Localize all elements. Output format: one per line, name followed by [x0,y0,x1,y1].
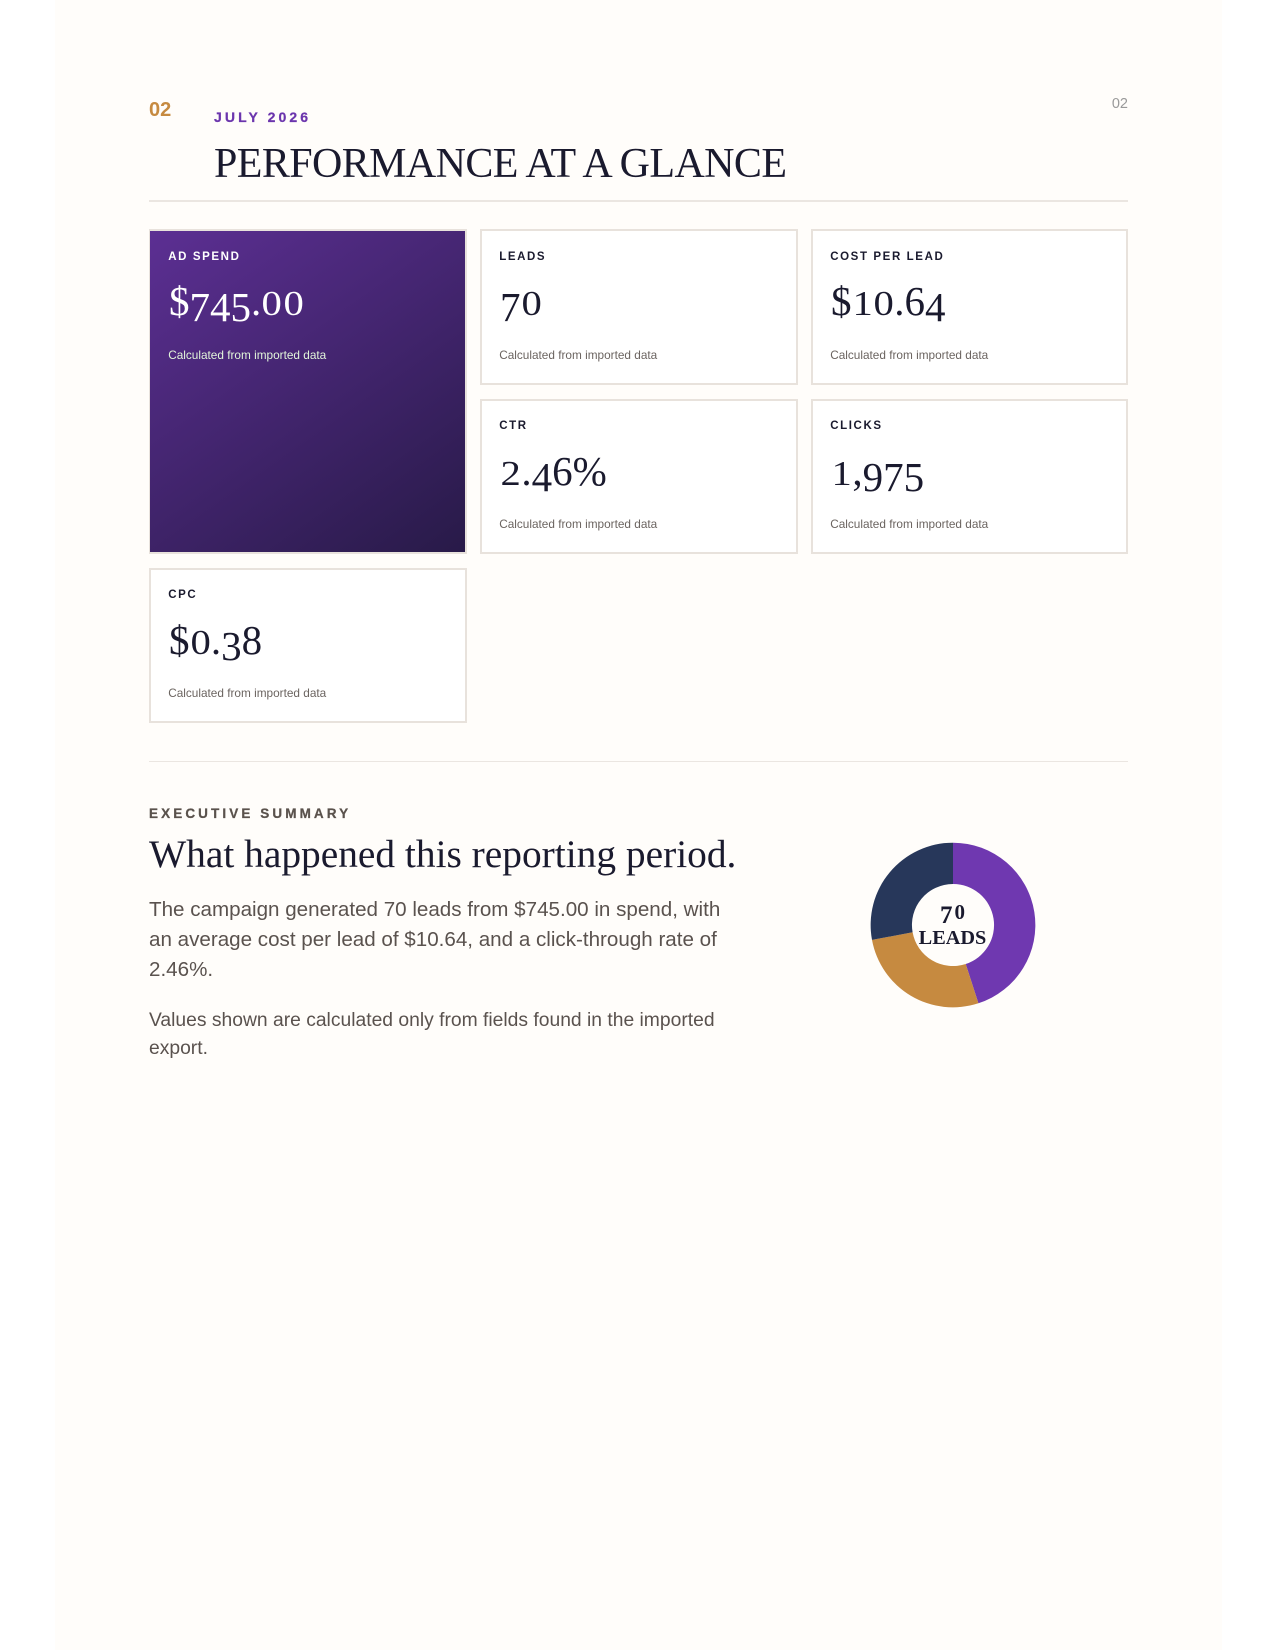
note: Calculated from imported data [499,517,657,531]
panel: cost per lead [811,229,1128,384]
summary paragraph one: 2.46%. [149,958,213,981]
label: AD SPEND [168,251,240,263]
summary paragraph two: Values shown are calculated only from fields found in the imported [149,1010,715,1031]
segment: gold [872,932,978,1007]
value: 0 [873,285,894,323]
center label: LEADS [918,927,986,949]
value: 1 [832,455,852,493]
center label: 7 [940,902,952,929]
donut chart [870,842,1036,1008]
note: Calculated from imported data [168,686,326,700]
note: Calculated from imported data [168,348,326,362]
value: 7 [500,284,520,330]
summary paragraph one [149,898,720,981]
value: $ .64 [831,278,945,330]
summary paragraph one: The campaign generated 70 leads from $745.00 in spend, with [149,898,720,921]
label: CTR [499,420,528,432]
summary heading: What happened this reporting period. [149,832,736,876]
value: $ .38 [169,617,262,669]
value: 0 [190,624,210,662]
value: 0 [283,285,303,323]
note: Calculated from imported data [830,517,988,531]
value [169,278,303,330]
panel: clicks [811,398,1128,554]
month eyebrow: JULY 2026 [214,108,311,124]
panel: cpc [149,568,466,723]
summary paragraph two: export. [149,1038,208,1059]
panel: ctr [480,398,798,554]
segment: navy [870,843,952,940]
value: 0 [521,285,541,323]
section number: 02 [149,99,171,121]
label: LEADS [499,251,546,263]
title: PERFORMANCE AT A GLANCE [214,140,786,186]
label: CPC [168,589,197,601]
note: Calculated from imported data [830,348,988,362]
label: CLICKS [830,420,883,432]
value: $745. [169,278,261,330]
note: Calculated from imported data [499,348,657,362]
panel: ad spend [149,229,466,554]
center label [918,900,986,949]
page number: 02 [1112,96,1128,112]
label: COST PER LEAD [830,251,944,263]
value: ,975 [852,448,924,500]
value [500,284,541,330]
panel: leads [480,229,798,384]
value: 2 [501,455,521,493]
executive summary eyebrow: EXECUTIVE SUMMARY [149,806,351,820]
summary paragraph one: an average cost per lead of $10.64, and a click-through rate of [149,928,717,951]
value: 0 [262,285,282,323]
segment: purple [952,843,1035,1003]
summary paragraph two [149,1010,715,1059]
value: .46% [521,448,607,500]
center label: 0 [954,900,964,924]
value: 1 [852,285,872,323]
